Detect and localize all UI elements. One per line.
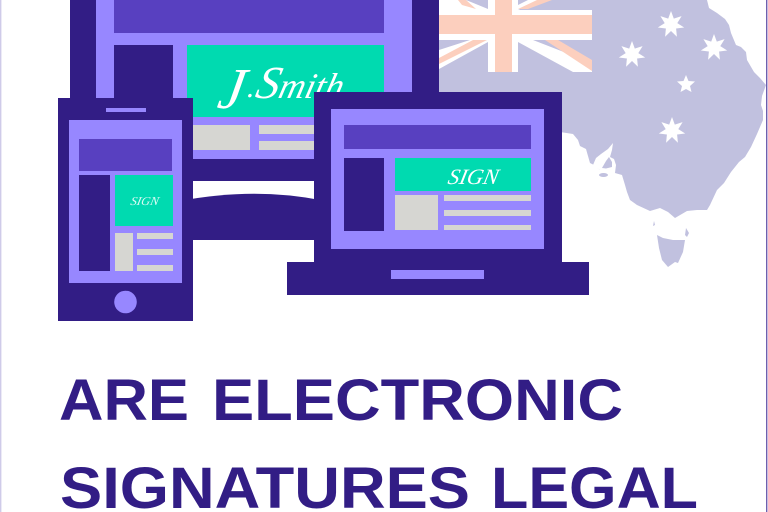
- laptop signature panel: SIGN: [446, 164, 502, 189]
- monitor stand: [180, 194, 320, 240]
- phone home button: [114, 291, 137, 313]
- laptop sidebar: [344, 158, 384, 231]
- icon: laptop: [287, 92, 589, 295]
- Southern Cross stars: [619, 11, 727, 143]
- Yorke Peninsula: [602, 157, 612, 168]
- phone header bar: [79, 139, 172, 171]
- map of Australia: [430, 0, 766, 267]
- Kangaroo Island: [599, 173, 608, 177]
- title: [59, 368, 698, 512]
- phone sidebar: [79, 175, 110, 271]
- icon: desktop monitor: [70, 0, 439, 240]
- phone signature panel: [115, 175, 173, 226]
- King Island: [653, 221, 655, 226]
- monitor content block: [193, 125, 319, 150]
- Flinders Island: [685, 228, 689, 237]
- Spencer Gulf: [593, 143, 616, 173]
- icon: smartphone: [58, 98, 193, 321]
- Tasmania: [657, 235, 685, 267]
- laptop signature panel: [395, 158, 531, 191]
- monitor signature panel: .: [245, 70, 259, 104]
- monitor signature panel: [187, 45, 384, 121]
- monitor signature panel: J: [214, 56, 251, 121]
- phone content block: [115, 233, 173, 271]
- laptop content block: [395, 195, 531, 230]
- flag: Union Jack: [439, 0, 592, 72]
- laptop header bar: [344, 125, 531, 149]
- monitor signature panel: Smith.: [251, 58, 360, 109]
- phone signature panel: SIGN: [129, 194, 161, 208]
- title: ELECTRONIC: [212, 368, 623, 433]
- monitor sidebar: [114, 45, 173, 115]
- title: ARE: [59, 368, 189, 433]
- monitor header bar: [114, 0, 384, 33]
